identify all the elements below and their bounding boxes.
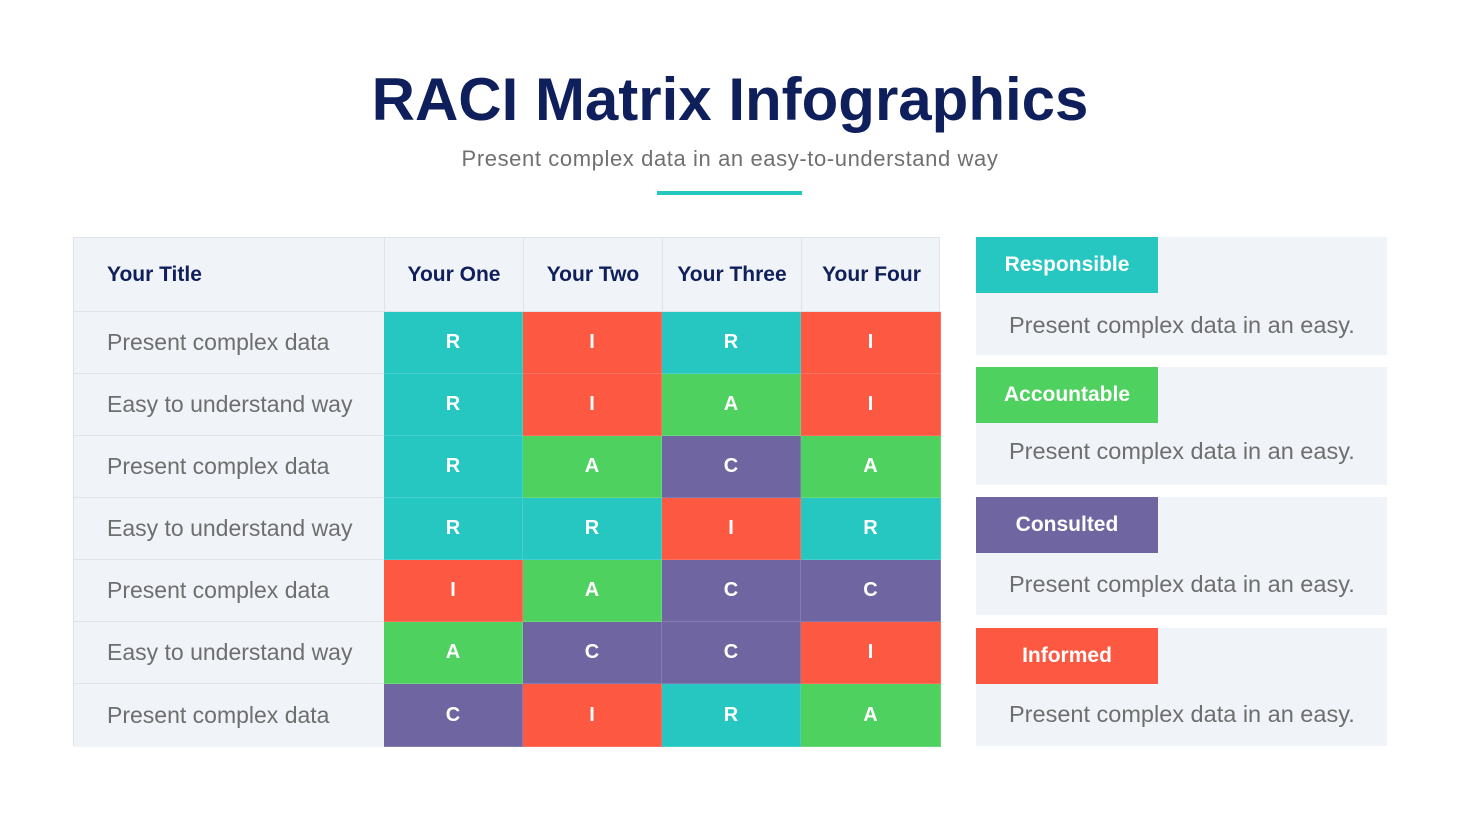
matrix cells: R — [446, 393, 460, 415]
matrix cells: I — [450, 579, 456, 601]
matrix cells: R — [585, 517, 599, 539]
matrix cells: A — [863, 455, 878, 477]
matrix cells: C — [863, 579, 878, 601]
row labels: Easy to understand way — [107, 515, 352, 541]
header row: Your Three — [677, 263, 787, 286]
matrix cells: A — [863, 704, 878, 726]
legend: accountable — [976, 367, 1387, 485]
matrix cells: I — [589, 331, 595, 353]
header row: Your Four — [822, 263, 921, 286]
legend: informed — [976, 628, 1387, 746]
matrix cells: C — [724, 455, 738, 477]
matrix cells: R — [446, 455, 460, 477]
legend: accountable: Accountable — [1004, 383, 1130, 406]
matrix cells: C — [724, 579, 738, 601]
matrix cells: R — [863, 517, 878, 539]
matrix cells: R — [724, 704, 738, 726]
matrix cells: A — [446, 641, 460, 663]
underline accent — [657, 191, 802, 195]
row labels: Easy to understand way — [107, 639, 352, 665]
legend: responsible: Responsible — [1005, 253, 1129, 276]
matrix cells: A — [724, 393, 738, 415]
row labels: Present complex data — [107, 577, 329, 603]
matrix cells: I — [589, 393, 595, 415]
matrix cells: R — [446, 331, 460, 353]
header row: Your Two — [547, 263, 639, 286]
matrix cells: C — [585, 641, 599, 663]
legend: responsible — [976, 237, 1387, 355]
matrix cells: I — [589, 704, 595, 726]
matrix cells: C — [724, 641, 738, 663]
matrix cells: A — [585, 579, 599, 601]
header row: Your Title — [107, 263, 202, 286]
row labels: Present complex data — [107, 329, 329, 355]
matrix cells: I — [868, 641, 873, 663]
legend: accountable: Present complex data in an easy. — [1009, 438, 1355, 464]
matrix cells: C — [446, 704, 460, 726]
row labels: Easy to understand way — [107, 391, 352, 417]
legend: consulted — [976, 497, 1387, 615]
row labels: Present complex data — [107, 702, 329, 728]
legend: informed: Present complex data in an easy. — [1009, 701, 1355, 727]
subtitle: Present complex data in an easy-to-understand way — [462, 146, 998, 171]
header row: Your One — [408, 263, 500, 286]
row labels — [74, 329, 384, 747]
title: RACI Matrix Infographics — [372, 66, 1088, 133]
matrix cells: R — [446, 517, 460, 539]
legend: consulted: Present complex data in an easy. — [1009, 571, 1355, 597]
matrix table — [73, 237, 940, 746]
matrix cells — [384, 312, 941, 747]
matrix cells: I — [868, 393, 873, 415]
matrix cells: I — [728, 517, 734, 539]
legend: consulted: Consulted — [1016, 513, 1118, 536]
header row — [74, 238, 941, 312]
legend: informed: Informed — [1022, 644, 1112, 667]
matrix cells: I — [868, 331, 873, 353]
matrix cells: R — [724, 331, 738, 353]
row labels: Present complex data — [107, 453, 329, 479]
matrix cells: A — [585, 455, 599, 477]
legend: responsible: Present complex data in an easy. — [1009, 312, 1355, 338]
